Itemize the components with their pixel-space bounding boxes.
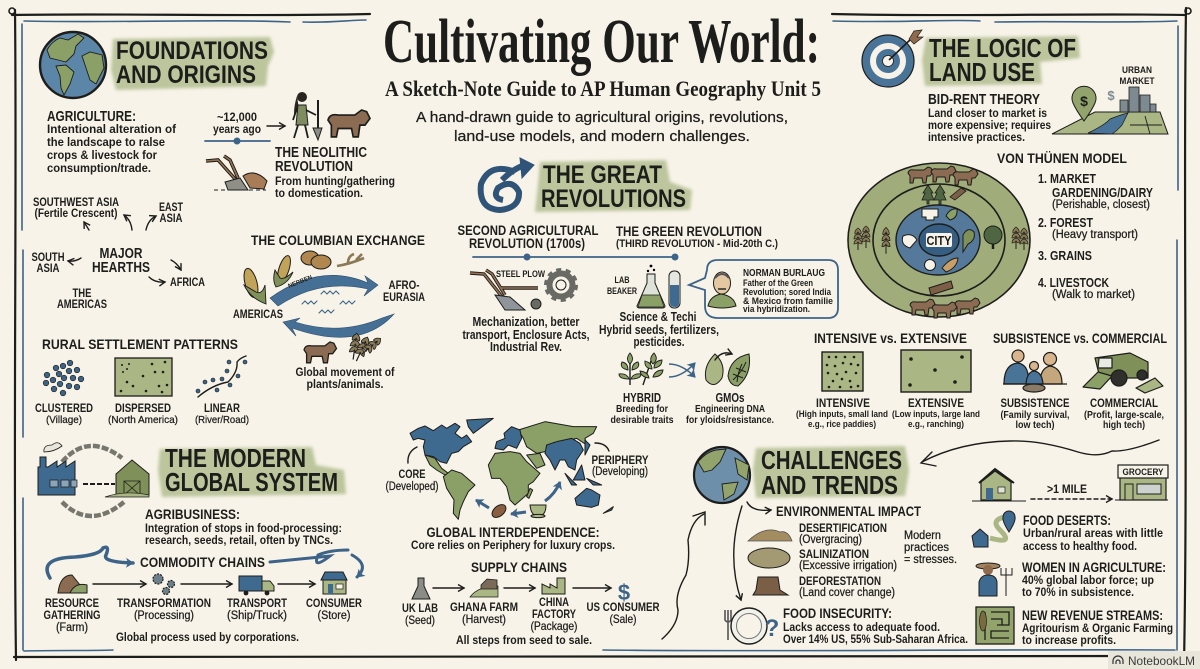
new revenue streams text: to increase profits. bbox=[1022, 635, 1116, 647]
comparison labels: e.g., ranching) bbox=[908, 419, 964, 430]
supply labels: GHANA FARM bbox=[450, 600, 518, 614]
neolithic revolution text: From hunting/gathering bbox=[275, 174, 395, 188]
food insecurity text: Lacks access to adequate food. bbox=[783, 622, 940, 634]
major hearths diagram: MAJOR bbox=[100, 246, 143, 262]
heading: CHALLENGES bbox=[761, 445, 902, 475]
icon: woman farmer bbox=[976, 563, 1012, 596]
agribusiness text: AGRIBUSINESS: bbox=[145, 506, 240, 522]
supply labels: UK LAB bbox=[402, 601, 438, 615]
major hearths diagram: SOUTH bbox=[32, 252, 64, 264]
callout: Norman Burlaug: & Mexico from familie bbox=[743, 296, 833, 306]
second agricultural revolution heading: REVOLUTION (1700s) bbox=[469, 236, 585, 251]
supply chains diagram: SUPPLY CHAINS bbox=[471, 559, 567, 575]
global interdependence text bbox=[411, 525, 615, 552]
major hearths diagram: ASIA bbox=[36, 263, 60, 275]
supply labels: All steps from seed to sale. bbox=[456, 633, 592, 647]
neolithic revolution text: THE NEOLITHIC bbox=[275, 145, 367, 161]
major hearths diagram: THE bbox=[72, 288, 92, 300]
mechanization text: Mechanization, better bbox=[472, 315, 580, 329]
icon: subsistence family bbox=[1003, 350, 1067, 392]
icon: truck bbox=[239, 576, 274, 595]
icon: clustered dots bbox=[43, 360, 84, 396]
periphery label: (Developing) bbox=[592, 466, 648, 478]
hybrid and GMO labels: Engineering DNA bbox=[695, 403, 765, 415]
region labels: AMERICAS bbox=[233, 309, 283, 321]
green revolution heading bbox=[616, 224, 778, 250]
columbian exchange diagram: NERBEN bbox=[288, 275, 313, 290]
hybrid and GMO labels: Breeding for bbox=[616, 403, 668, 415]
icon: factory bbox=[542, 578, 565, 594]
chain labels: GATHERING bbox=[44, 610, 101, 622]
icons: market gardening bbox=[902, 209, 974, 272]
mechanization text: Industrial Rev. bbox=[490, 340, 562, 354]
new revenue streams text: Agritourism & Organic Farming bbox=[1022, 623, 1173, 635]
flow arrows bbox=[476, 482, 560, 514]
columbian exchange diagram: plants/animals. bbox=[306, 377, 384, 391]
icon: wheat bbox=[348, 333, 383, 363]
neolithic revolution text: REVOLUTION bbox=[275, 159, 353, 175]
von thunen list: GARDENING/DAIRY bbox=[1052, 186, 1154, 200]
icon: hybrid plants bbox=[619, 353, 663, 385]
core label: (Developed) bbox=[386, 481, 439, 493]
major hearths diagram: ASIA bbox=[160, 213, 182, 225]
science text: Hybrid seeds, fertilizers, bbox=[599, 323, 719, 337]
major hearths diagram: HEARTHS bbox=[92, 260, 150, 276]
icon: chain linking factory and barn bbox=[38, 443, 149, 516]
callout: Norman Burlaug: Father of the Green bbox=[743, 278, 813, 288]
global interdependence text: GLOBAL INTERDEPENDENCE: bbox=[426, 525, 600, 540]
von thunen list: (Perishable, closest) bbox=[1052, 199, 1150, 211]
food deserts text: FOOD DESERTS: bbox=[1023, 513, 1111, 528]
comparison labels: low tech) bbox=[1016, 419, 1054, 431]
icon: neolithic farmer bbox=[293, 92, 322, 140]
heading bbox=[761, 445, 902, 500]
heading: THE MODERN bbox=[165, 443, 306, 473]
columbian exchange diagram: EURASIA bbox=[383, 292, 425, 304]
chain labels: (Ship/Truck) bbox=[227, 610, 287, 622]
von thunen list bbox=[1038, 172, 1154, 301]
icon: lab beaker and test tube: LAB bbox=[614, 275, 630, 286]
panel: farming comparisons bbox=[796, 330, 1167, 431]
supply labels bbox=[402, 595, 660, 647]
von thunen list: 2. FOREST bbox=[1038, 216, 1093, 230]
icon: potatoes bbox=[301, 251, 331, 269]
icon: flask bbox=[412, 578, 430, 599]
major hearths diagram: (Fertile Crescent) bbox=[34, 208, 118, 220]
icon: dispersed field bbox=[115, 358, 172, 396]
comparison labels: e.g., rice paddies) bbox=[808, 419, 876, 430]
environmental impact block bbox=[748, 504, 957, 599]
chain labels: TRANSPORT bbox=[227, 598, 287, 610]
impact labels: SALINIZATION bbox=[799, 549, 869, 561]
second agricultural revolution heading: SECOND AGRICULTURAL bbox=[458, 223, 598, 238]
food insecurity text: Over 14% US, 55% Sub-Saharan Africa. bbox=[783, 634, 968, 646]
blue arrow to Americas bbox=[283, 314, 394, 337]
green revolution heading: THE GREEN REVOLUTION bbox=[616, 224, 762, 239]
heading highlight bbox=[753, 446, 909, 498]
icon: gears bbox=[153, 574, 174, 594]
agribusiness text: Integration of stops in food-processing: bbox=[145, 521, 342, 535]
heading: von thunen model: VON THÜNEN MODEL bbox=[997, 150, 1127, 166]
food deserts text: access to healthy food. bbox=[1023, 541, 1137, 553]
von thunen list: 3. GRAINS bbox=[1038, 249, 1092, 263]
impact labels: (Land cover change) bbox=[799, 587, 895, 599]
core label bbox=[386, 447, 439, 493]
icon: cacao pod bbox=[490, 502, 508, 520]
agriculture definition: consumption/trade. bbox=[47, 161, 151, 175]
neolithic revolution text: to domestication. bbox=[275, 186, 363, 200]
panel: challenges and trends bbox=[694, 440, 1173, 647]
chain labels: (Processing) bbox=[134, 610, 194, 622]
callout: Norman Burlaug: Revolution; sored India bbox=[743, 287, 832, 297]
icon: plate, fork and question mark: ? bbox=[765, 615, 779, 642]
icon: store bbox=[321, 572, 347, 594]
chain labels bbox=[44, 598, 363, 644]
von thunen list: (Walk to market) bbox=[1052, 289, 1135, 301]
callout: Norman Burlaug: NORMAN BURLAUG bbox=[743, 267, 825, 279]
agriculture definition: crops & livestock for bbox=[47, 148, 157, 162]
city label: CITY bbox=[926, 233, 952, 248]
settlement labels: DISPERSED bbox=[115, 403, 171, 415]
major hearths diagram: AMERICAS bbox=[57, 299, 107, 311]
agribusiness text: research, seeds, retail, often by TNCs. bbox=[145, 533, 333, 547]
rural settlement patterns bbox=[35, 336, 249, 426]
icons: grains bbox=[854, 226, 1028, 254]
settlement labels: (North America) bbox=[108, 414, 178, 426]
illustration: urban market: MARKET bbox=[1120, 76, 1155, 87]
portrait bbox=[708, 272, 736, 308]
supply labels: (Harvest) bbox=[462, 612, 506, 626]
women in agriculture text: to 70% in subsistence. bbox=[1022, 587, 1134, 599]
icon: cow bbox=[328, 110, 370, 137]
periphery label: PERIPHERY bbox=[592, 453, 648, 467]
core label: CORE bbox=[398, 467, 426, 481]
columbian exchange diagram: Global movement of bbox=[296, 365, 395, 379]
von thunen list: 1. MARKET bbox=[1038, 172, 1096, 186]
bid-rent theory text bbox=[928, 92, 1051, 144]
chain labels: RESOURCE bbox=[45, 598, 99, 610]
chain labels: CONSUMER bbox=[306, 598, 363, 610]
new revenue streams text bbox=[1022, 608, 1173, 647]
description: A hand-drawn guide to agricultural origins, revolutions, bbox=[416, 109, 788, 126]
illustration: urban market: $ bbox=[1080, 93, 1088, 109]
green revolution heading: (THIRD REVOLUTION - Mid-20th C.) bbox=[616, 238, 778, 250]
supply labels: US CONSUMER bbox=[586, 600, 660, 614]
supply labels: CHINA bbox=[539, 595, 569, 609]
illustration: urban market: $ bbox=[1107, 88, 1115, 103]
columbian exchange diagram bbox=[233, 232, 425, 391]
panel: the great revolutions bbox=[458, 158, 838, 426]
icon: corn bbox=[241, 254, 293, 304]
columbian exchange diagram: AFRO- bbox=[388, 280, 420, 292]
impact labels: DESERTIFICATION bbox=[799, 523, 887, 535]
impact labels: Modern bbox=[904, 530, 941, 542]
comparison labels: COMMERCIAL bbox=[1090, 396, 1158, 410]
title block bbox=[383, 8, 821, 145]
icon: gear bbox=[546, 270, 576, 300]
settlement labels: LINEAR bbox=[204, 403, 241, 415]
science text: pesticides. bbox=[634, 335, 684, 349]
impact labels: DEFORESTATION bbox=[799, 576, 881, 588]
heading highlight bbox=[535, 160, 692, 212]
icon: map route to home bbox=[972, 511, 1015, 547]
science text: Science & Techi bbox=[620, 310, 696, 324]
chain labels: (Store) bbox=[318, 610, 351, 622]
second agricultural revolution heading bbox=[458, 223, 598, 251]
food insecurity text: FOOD INSECURITY: bbox=[783, 606, 892, 621]
women in agriculture text bbox=[1022, 560, 1166, 599]
hybrid and GMO labels: HYBRID bbox=[623, 391, 661, 405]
icon: globe bbox=[40, 32, 106, 98]
icon: steel plow: STEEL PLOW bbox=[496, 269, 545, 280]
impact labels: = stresses. bbox=[904, 554, 957, 566]
major hearths diagram: EAST bbox=[159, 202, 183, 214]
world map bbox=[410, 418, 613, 519]
icon: tree stump bbox=[753, 577, 788, 595]
illustration: house to grocery distance: GROCERY bbox=[1122, 467, 1164, 478]
watermark: NotebookLM: NotebookLM bbox=[1128, 654, 1195, 668]
settlement labels bbox=[35, 403, 249, 426]
illustration: urban market: URBAN bbox=[1122, 65, 1152, 76]
comparison labels bbox=[796, 396, 1164, 431]
icons: forest bbox=[922, 185, 1002, 295]
heading: THE LOGIC OF bbox=[929, 33, 1076, 63]
panel: the modern global system bbox=[38, 443, 363, 644]
timeline: 12,000 years ago: years ago bbox=[213, 122, 261, 136]
arrow: to challenges heading bbox=[921, 440, 1159, 466]
agriculture definition: AGRICULTURE: bbox=[47, 108, 136, 125]
heading: FOUNDATIONS bbox=[116, 37, 268, 65]
rural settlement patterns: RURAL SETTLEMENT PATTERNS bbox=[42, 336, 238, 352]
illustration: house to grocery distance: >1 MILE bbox=[1047, 484, 1087, 496]
comparison labels: (High inputs, small land bbox=[796, 409, 888, 420]
heading: REVOLUTIONS bbox=[541, 185, 686, 213]
agriculture definition: the landscape to ralse bbox=[47, 135, 165, 149]
hybrid and GMO labels bbox=[610, 391, 774, 426]
von thunen list: (Heavy transport) bbox=[1052, 229, 1138, 241]
supply labels: (Seed) bbox=[405, 613, 435, 627]
icon: extensive plot bbox=[901, 350, 971, 392]
panel: global interdependence bbox=[386, 418, 705, 647]
heading highlight bbox=[111, 37, 274, 90]
chain labels: Global process used by corporations. bbox=[116, 632, 299, 644]
icon: lab beaker and test tube: BEAKER bbox=[607, 286, 637, 297]
bid-rent theory text: intensive practices. bbox=[928, 132, 1025, 144]
icon: farm bbox=[470, 579, 498, 597]
major hearths diagram: SOUTHWEST ASIA bbox=[33, 197, 119, 209]
illustration: house to grocery distance bbox=[972, 465, 1168, 501]
callout: Norman Burlaug: via hybridization. bbox=[743, 304, 810, 314]
von thunen list: 4. LIVESTOCK bbox=[1038, 276, 1109, 290]
blue arrow to Afro-Eurasia bbox=[270, 275, 378, 306]
impact labels: (Excessive irrigation) bbox=[799, 560, 897, 572]
mechanization text bbox=[462, 315, 590, 354]
food insecurity text bbox=[783, 606, 968, 646]
women in agriculture text: 40% global labor force; up bbox=[1022, 575, 1154, 587]
supply chains diagram bbox=[402, 559, 660, 647]
agribusiness text bbox=[145, 506, 342, 547]
chain labels: (Farm) bbox=[56, 622, 88, 634]
neolithic revolution text bbox=[275, 145, 395, 200]
comparison labels: (Low inputs, large land bbox=[892, 409, 980, 420]
illustration: urban market bbox=[1052, 65, 1168, 134]
heading: AND TRENDS bbox=[761, 470, 898, 500]
icon: combine harvester bbox=[1083, 353, 1163, 393]
icon: globe bbox=[694, 447, 750, 503]
timeline: 12,000 years ago: ~12,000 bbox=[217, 110, 257, 124]
chain labels: TRANSFORMATION bbox=[117, 598, 211, 610]
settlement labels: (Village) bbox=[46, 414, 82, 426]
comparison labels: INTENSIVE bbox=[816, 396, 870, 410]
science text bbox=[599, 310, 719, 349]
icon: steel plow bbox=[470, 269, 545, 310]
blue swoosh arrows bbox=[47, 547, 362, 578]
agriculture definition bbox=[47, 108, 177, 175]
description: land-use models, and modern challenges. bbox=[454, 128, 750, 145]
settlement labels: CLUSTERED bbox=[35, 403, 93, 415]
comparison labels: high tech) bbox=[1103, 419, 1145, 431]
subtitle: A Sketch-Note Guide to AP Human Geography Unit 5 bbox=[385, 76, 821, 101]
chart: von thunen rings bbox=[848, 163, 1030, 318]
panel: the logic of land use bbox=[848, 30, 1168, 318]
arrow: wavy arrow to challenges bbox=[662, 512, 705, 639]
description bbox=[416, 109, 788, 145]
global interdependence text: Core relies on Periphery for luxury crops. bbox=[411, 538, 615, 552]
bid-rent theory text: BID-RENT THEORY bbox=[928, 92, 1040, 108]
hybrid and GMO labels: desirable traits bbox=[610, 414, 674, 426]
callout: Norman Burlaug bbox=[689, 260, 838, 318]
icon: intensive plot bbox=[822, 352, 863, 391]
environmental impact block: ENVIRONMENTAL IMPACT bbox=[776, 504, 922, 519]
arrows from globe bbox=[734, 502, 771, 600]
impact labels: (Overgracing) bbox=[799, 534, 862, 546]
heading bbox=[165, 443, 338, 497]
heading bbox=[929, 33, 1076, 87]
columbian exchange diagram: THE COLUMBIAN EXCHANGE bbox=[251, 232, 425, 248]
icon: lab beaker and test tube bbox=[607, 265, 680, 308]
icon: cow bbox=[304, 342, 336, 363]
water waves bbox=[302, 291, 355, 313]
comparison labels: SUBSISTENCE bbox=[1000, 396, 1070, 410]
icons: livestock bbox=[908, 166, 980, 318]
hybrid and GMO labels: GMOs bbox=[716, 391, 745, 405]
heading bbox=[116, 37, 268, 89]
heading highlight bbox=[158, 447, 346, 497]
heading bbox=[541, 161, 686, 213]
icon: coffee cup bbox=[530, 505, 546, 518]
title: Cultivating Our World: bbox=[383, 8, 820, 76]
agriculture definition: Intentional alteration of bbox=[47, 122, 177, 136]
women in agriculture text: WOMEN IN AGRICULTURE: bbox=[1022, 560, 1166, 575]
food deserts text: Urban/rural areas with little bbox=[1023, 528, 1163, 540]
icon: target with arrow bbox=[862, 30, 923, 87]
commodity chains diagram bbox=[44, 547, 363, 644]
icon: wooden plow bbox=[206, 156, 267, 190]
major hearths diagram: AFRICA bbox=[170, 277, 205, 289]
watermark: NotebookLM bbox=[1108, 651, 1200, 669]
major hearths diagram bbox=[32, 197, 205, 311]
heading: THE GREAT bbox=[543, 161, 662, 189]
icon: farm bbox=[58, 575, 87, 593]
supply labels: (Package) bbox=[530, 619, 578, 633]
comparison labels: (Profit, large-scale, bbox=[1084, 409, 1164, 421]
food deserts text bbox=[1023, 513, 1163, 553]
icon: dollar sign: $ bbox=[618, 580, 630, 605]
icon: salt crust bbox=[748, 548, 790, 568]
panel: foundations and origins bbox=[32, 32, 425, 426]
timeline: 12,000 years ago bbox=[205, 110, 285, 144]
supply arrows bbox=[433, 587, 611, 589]
icon: linear settlement bbox=[196, 356, 247, 397]
mechanization text: transport, Enclosure Acts, bbox=[462, 328, 590, 342]
supply labels: (Sale) bbox=[610, 612, 636, 626]
heading highlight bbox=[922, 36, 1080, 86]
heading: intensive vs extensive: INTENSIVE vs. EXTENSIVE bbox=[814, 330, 967, 346]
comparison labels: (Family survival, bbox=[1000, 409, 1070, 421]
icon: spiral arrow bbox=[481, 158, 534, 210]
icon: corn maze bbox=[976, 607, 1014, 644]
hybrid and GMO labels: for yloids/resistance. bbox=[686, 414, 774, 426]
icon: crossing arrows bbox=[669, 363, 695, 377]
chain arrows bbox=[93, 583, 315, 585]
revolutions timeline bbox=[473, 254, 678, 260]
settlement labels: (River/Road) bbox=[195, 414, 249, 426]
icon: cotton plant bbox=[337, 254, 364, 266]
bid-rent theory text: more expensive; requires bbox=[928, 120, 1051, 132]
heading: GLOBAL SYSTEM bbox=[165, 467, 338, 497]
icon: plate, fork and question mark bbox=[725, 608, 779, 644]
heading: LAND USE bbox=[929, 57, 1035, 87]
icon: dry land bbox=[748, 530, 792, 541]
icon: GMO seeds bbox=[705, 353, 750, 386]
new revenue streams text: NEW REVENUE STREAMS: bbox=[1022, 608, 1163, 623]
comparison labels: EXTENSIVE bbox=[908, 396, 964, 410]
impact labels: practices bbox=[904, 542, 949, 554]
periphery label bbox=[592, 443, 648, 478]
heading: AND ORIGINS bbox=[116, 61, 256, 89]
bid-rent theory text: Land closer to market is bbox=[928, 108, 1047, 120]
commodity chains diagram: COMMODITY CHAINS bbox=[140, 554, 265, 570]
impact labels bbox=[799, 523, 957, 599]
supply labels: FACTORY bbox=[532, 607, 576, 621]
